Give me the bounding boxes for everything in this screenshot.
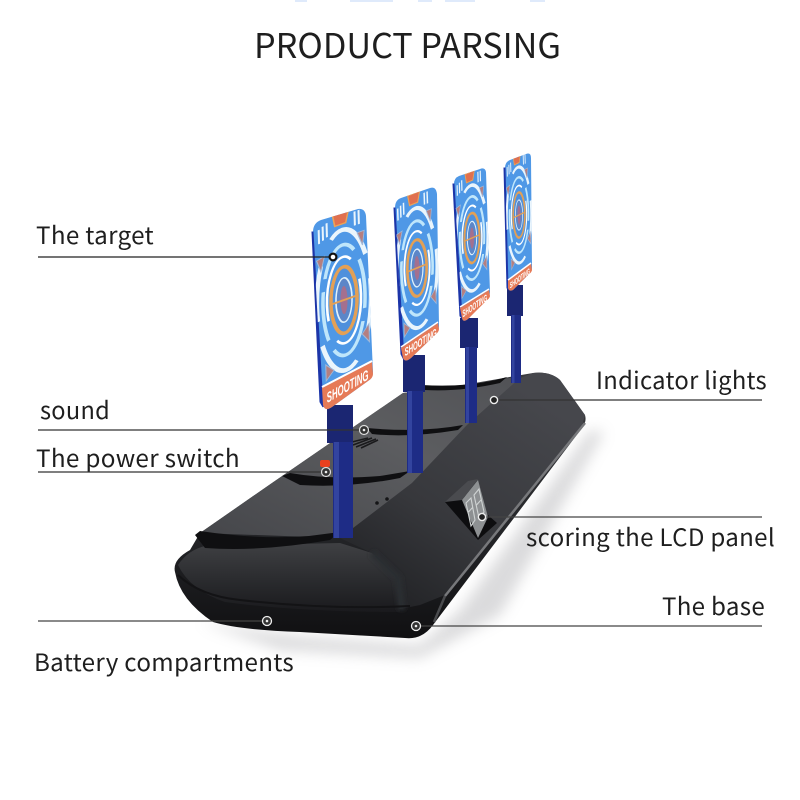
target 4	[504, 149, 533, 291]
product: shooting target base	[175, 149, 604, 658]
title: PRODUCT PARSING	[254, 19, 561, 68]
base front slope	[340, 373, 585, 610]
decorative top edge marks	[295, 0, 545, 2]
target 3: SHOOTING	[462, 292, 488, 321]
callout: The target: The target	[36, 216, 154, 251]
callout: Battery compartments	[34, 616, 294, 678]
callout: The target	[36, 216, 336, 260]
callout: scoring the LCD panel: scoring the LCD panel	[526, 518, 775, 553]
base body	[175, 373, 586, 638]
speaker slots	[352, 438, 378, 448]
post 1	[327, 405, 353, 538]
LCD panel	[445, 479, 497, 540]
target 4: SHOOTING	[509, 267, 530, 290]
callout: Battery compartments: Battery compartments	[34, 643, 294, 678]
soft facet blend	[372, 553, 402, 610]
target 3	[453, 165, 490, 321]
callout: sound: sound	[40, 391, 110, 426]
callout: The power switch: The power switch	[36, 439, 240, 474]
top recess 1	[195, 531, 340, 549]
front edge highlight	[445, 423, 585, 596]
callout: Indicator lights	[490, 361, 767, 404]
lower seam	[178, 575, 410, 607]
target 2: SHOOTING	[404, 327, 437, 359]
small holes	[375, 497, 389, 505]
post 4	[507, 285, 523, 383]
callout: The base	[412, 587, 765, 630]
target 1	[312, 203, 373, 409]
target 2	[394, 185, 439, 360]
base shadow	[200, 430, 604, 658]
top recess 4	[422, 377, 507, 390]
power switch	[320, 460, 330, 467]
post 2	[403, 355, 425, 473]
callout: The power switch	[36, 439, 330, 476]
top recess 3	[367, 425, 463, 435]
callout: The base: The base	[662, 587, 765, 622]
top recess 2	[282, 471, 410, 486]
callout: Indicator lights: Indicator lights	[596, 361, 767, 396]
top face	[200, 378, 520, 538]
callout: sound	[38, 391, 368, 434]
left nose	[178, 543, 400, 612]
post 3	[460, 318, 478, 423]
target 1: SHOOTING	[326, 366, 369, 406]
